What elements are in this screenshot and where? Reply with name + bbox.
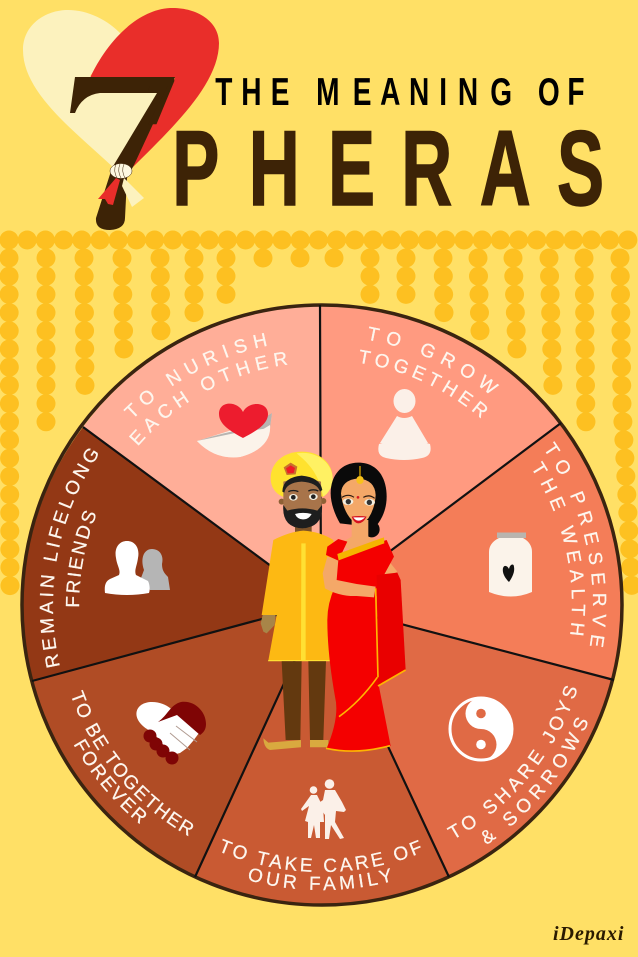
- icon: heart in bowl: [197, 404, 272, 457]
- neck: [295, 523, 312, 535]
- panel: to nurish each other: [83, 306, 320, 564]
- label: FOREVER: [74, 738, 146, 824]
- signature: iDepaxi: [553, 923, 624, 945]
- label: TO TAKE CARE OF: [222, 838, 421, 872]
- label: TO SHARE JOYS: [446, 686, 577, 838]
- saree borders: [326, 588, 406, 751]
- spokes: [32, 305, 614, 877]
- wheel: [20, 303, 624, 907]
- gold sash: [337, 537, 384, 560]
- icon: yin yang: [450, 698, 512, 760]
- panel: to grow together: [321, 306, 558, 552]
- icon: handshake: [136, 702, 206, 764]
- red ribbon: [98, 178, 120, 205]
- red heart half: [90, 8, 219, 168]
- marigold garland: [9, 240, 638, 593]
- trousers: [282, 661, 326, 740]
- title line: pheras: PHERAS: [172, 109, 604, 229]
- panel: to take care of our family: [196, 661, 448, 904]
- eyes: [343, 498, 353, 505]
- label: REMAIN LIFELONG: [40, 448, 98, 668]
- knot: [110, 164, 132, 178]
- eyes: [289, 494, 298, 501]
- label: EACH OTHER: [129, 352, 288, 446]
- panel: to be together forever: [34, 616, 293, 875]
- label: TOGETHER: [360, 350, 488, 418]
- panel: to share joys and sorrows: [377, 619, 610, 875]
- kurta: [262, 531, 340, 661]
- icon: two friends: [105, 541, 170, 595]
- label: TO BE TOGETHER: [72, 690, 194, 836]
- label: THE WEALTH: [533, 460, 586, 636]
- icon: meditating figure: [378, 389, 431, 460]
- pallu: [377, 573, 406, 686]
- ears: [279, 499, 285, 505]
- hair: [282, 476, 322, 493]
- couple illustration: [261, 452, 406, 751]
- heart with number seven: [23, 8, 219, 230]
- icon: jar with heart: [489, 532, 532, 596]
- panel: remain lifelong friends: [24, 427, 270, 680]
- numeral seven: 7: [141, 63, 176, 140]
- lips: [352, 516, 367, 523]
- label: FRIENDS: [66, 510, 96, 606]
- face: [283, 479, 322, 528]
- saree body: [327, 540, 394, 751]
- title line: the meaning of: THEMEANINGOF: [215, 71, 585, 114]
- label: TO GROW: [369, 326, 500, 394]
- panel: to preserve the wealth: [376, 425, 620, 678]
- right arm: [382, 558, 397, 576]
- face: [341, 478, 376, 524]
- label: [222, 838, 421, 890]
- neck and chest: [340, 520, 377, 550]
- groom: [261, 452, 340, 750]
- shoes: [263, 738, 328, 750]
- label: TO NURISH: [124, 333, 267, 416]
- beard: [283, 505, 322, 528]
- seven stroke and tail: [70, 77, 175, 230]
- cream ribbon: [122, 178, 144, 207]
- blouse sleeve: [326, 539, 347, 561]
- cream heart half: [23, 10, 172, 172]
- turban: [271, 452, 333, 497]
- bride: [323, 463, 406, 751]
- label: OUR FAMILY: [248, 868, 390, 890]
- label: TO PRESERVE: [546, 441, 606, 648]
- hand: [261, 615, 276, 633]
- hair: [331, 463, 387, 527]
- label: & SORROWS: [482, 718, 588, 844]
- icon: walking family: [301, 779, 346, 839]
- left arm: [323, 557, 376, 597]
- tikka: [359, 466, 361, 476]
- wheel rim: [22, 305, 622, 905]
